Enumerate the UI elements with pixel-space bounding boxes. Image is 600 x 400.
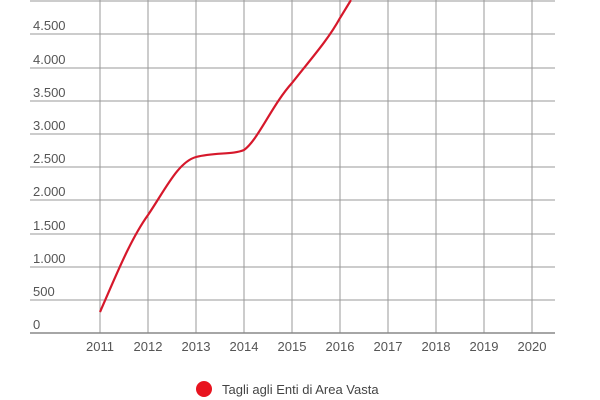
x-axis labels: 2016 [326,339,354,354]
x-axis labels: 2019 [470,339,498,354]
y-axis labels: 4.500 [33,18,66,33]
x-axis labels [86,339,546,354]
x-axis labels: 2018 [422,339,450,354]
y-axis labels [33,18,66,332]
x-axis labels: 2017 [374,339,402,354]
x-axis labels: 2012 [134,339,162,354]
x-axis labels: 2011 [86,339,114,354]
data line [100,0,351,312]
x-axis labels: 2013 [182,339,210,354]
legend: Tagli agli Enti di Area Vasta [222,382,379,397]
y-axis labels: 2.500 [33,151,66,166]
y-axis labels: 3.500 [33,85,66,100]
y-axis labels: 500 [33,284,55,299]
y-axis labels: 1.500 [33,218,66,233]
x-axis labels: 2020 [518,339,546,354]
y-axis labels: 2.000 [33,184,66,199]
y-axis labels: 1.000 [33,251,66,266]
y-axis labels: 3.000 [33,118,66,133]
y-axis labels: 0 [33,317,40,332]
y-axis labels: 4.000 [33,52,66,67]
x-axis labels: 2014 [230,339,258,354]
x-axis labels: 2015 [278,339,306,354]
